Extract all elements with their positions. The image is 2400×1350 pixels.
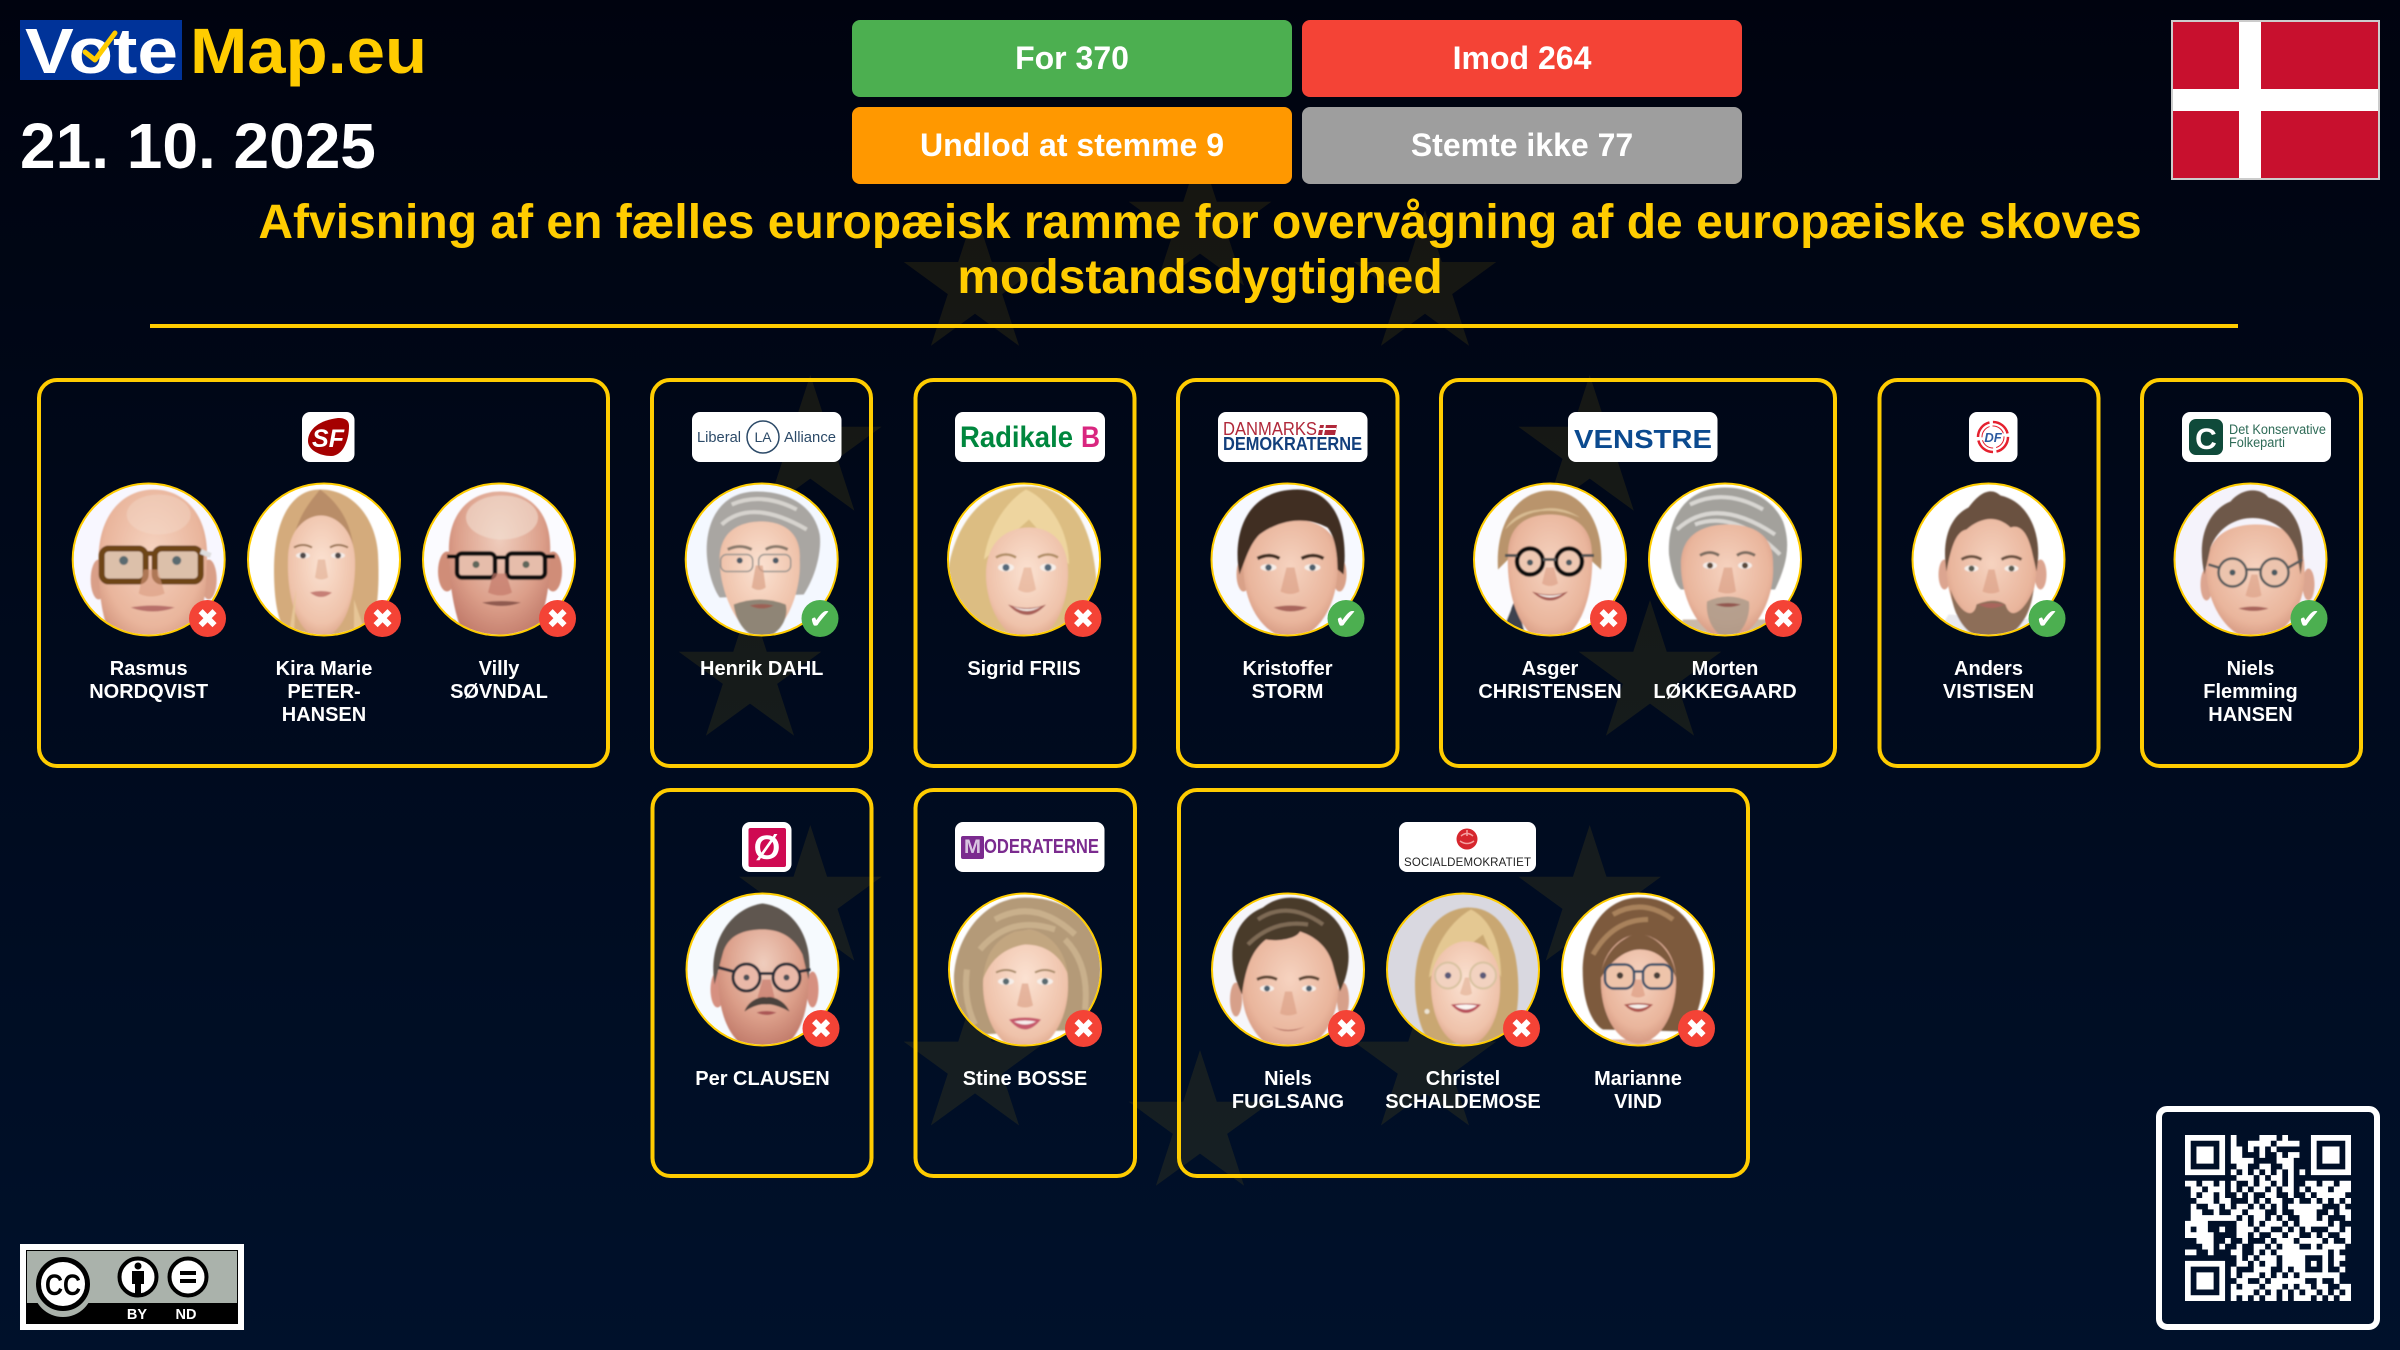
- vote badge: for: ✔: [2036, 604, 2058, 635]
- member: Marianne Vind: [1562, 894, 1715, 1113]
- name: SCHALDEMOSE: [1385, 1091, 1541, 1113]
- party logo: Enhedslisten: [742, 822, 792, 872]
- party logo: Danmarksdemokraterne: DANMARKS: [1223, 419, 1317, 439]
- vote badge: against: ✖: [1772, 604, 1795, 635]
- licence badge: CC BY-ND: [23, 1247, 241, 1327]
- name: Niels: [2227, 658, 2274, 680]
- vote badge: against: [1065, 1010, 1102, 1047]
- total: for: [852, 20, 1292, 97]
- panel: Socialdemokratiet: [1179, 790, 1748, 1176]
- icon: attribution: [120, 1258, 156, 1296]
- licence badge: CC BY-ND: BY: [127, 1307, 147, 1323]
- vote badge: against: ✖: [546, 604, 569, 635]
- party logo: Moderaterne: ODERATERNE: [984, 836, 1099, 858]
- vote badge: for: ✔: [2298, 604, 2320, 635]
- QR code: [2159, 1109, 2377, 1327]
- vote badge: for: [1328, 600, 1364, 637]
- party logo: Liberal Alliance: LA: [754, 429, 772, 445]
- party logo: Det Konservative Folkeparti: [2182, 412, 2331, 462]
- party logo: SF: [302, 412, 354, 462]
- member: Stine Bosse: [949, 894, 1102, 1090]
- panel: Danmarksdemokraterne: [1178, 380, 1398, 766]
- panel: Moderaterne: [916, 790, 1135, 1176]
- party logo: Radikale B: B: [1081, 421, 1100, 454]
- party logo: Moderaterne: [955, 822, 1104, 872]
- vote badge: against: ✖: [371, 604, 394, 635]
- vote badge: for: [2290, 600, 2328, 637]
- panel: Liberal Alliance: [652, 380, 871, 766]
- licence badge: CC BY-ND: CC: [45, 1269, 81, 1302]
- party logo: Dansk Folkeparti: [1969, 412, 2018, 462]
- party logo: Det Konservative Folkeparti: Det Konservative: [2229, 422, 2326, 437]
- total: abstain: Undlod at stemme 9: [920, 127, 1224, 163]
- name: Sigrid FRIIS: [967, 658, 1081, 680]
- logo: VoteMap.eu: [20, 15, 427, 87]
- vote badge: for: [802, 600, 838, 637]
- member: Niels Flemming Hansen: [2174, 484, 2328, 726]
- member: Kira Marie Peter-Hansen: [248, 484, 401, 726]
- party logo: Socialdemokratiet: [1399, 822, 1536, 872]
- vote badge: against: [1328, 1010, 1365, 1047]
- vote badge: against: ✖: [1685, 1014, 1708, 1045]
- party logo: Liberal Alliance: [692, 412, 842, 462]
- member: Henrik Dahl: [686, 484, 838, 680]
- total: did not vote: Stemte ikke 77: [1411, 127, 1633, 163]
- panel: Radikale Venstre: [916, 380, 1134, 766]
- member: Niels Fuglsang: [1212, 894, 1365, 1113]
- name: SØVNDAL: [450, 681, 548, 703]
- member: Kristoffer Storm: [1212, 484, 1364, 703]
- vote badge: against: [1503, 1010, 1540, 1047]
- panel: Venstre: [1441, 380, 1835, 766]
- name: Kira Marie: [276, 658, 372, 680]
- name: STORM: [1252, 681, 1323, 703]
- vote badge: against: [1765, 600, 1802, 637]
- name: Stine BOSSE: [963, 1068, 1087, 1090]
- vote badge: against: ✖: [1335, 1014, 1358, 1045]
- title: modstandsdygtighed: [957, 251, 1443, 304]
- name: Morten: [1692, 658, 1758, 680]
- member: Asger Christensen: [1474, 484, 1627, 703]
- party logo: Radikale B: Radikale: [960, 421, 1073, 454]
- party logo: Moderaterne: M: [964, 837, 981, 858]
- vote badge: against: [802, 1010, 840, 1047]
- vote totals: [852, 20, 1742, 184]
- vote badge: against: [1064, 600, 1102, 637]
- party logo: Venstre: VENSTRE: [1574, 424, 1712, 454]
- name: FUGLSANG: [1232, 1091, 1344, 1113]
- name: Niels: [1264, 1068, 1312, 1090]
- member: Per Clausen: [686, 894, 840, 1090]
- party logo: Det Konservative Folkeparti: C: [2195, 423, 2217, 456]
- name: LØKKEGAARD: [1653, 681, 1797, 703]
- total: abstain: [852, 107, 1292, 184]
- flag: Denmark: [2172, 21, 2379, 179]
- name: Christel: [1426, 1068, 1500, 1090]
- name: Anders: [1954, 658, 2023, 680]
- panel: Det Konservative Folkeparti: [2142, 380, 2361, 766]
- name: HANSEN: [2208, 704, 2293, 726]
- vote badge: against: ✖: [1072, 1014, 1095, 1045]
- vote badge: for: ✔: [1335, 604, 1357, 635]
- party logo: Dansk Folkeparti: DF: [1984, 430, 2003, 445]
- vote badge: against: ✖: [196, 604, 219, 635]
- member: Sigrid Friis: [947, 484, 1102, 680]
- party logo: Venstre: [1568, 412, 1718, 462]
- name: Rasmus: [110, 658, 188, 680]
- vote badge: against: [1590, 600, 1627, 637]
- licence badge: CC BY-ND: ND: [176, 1307, 196, 1323]
- member: Villy Søvndal: [423, 484, 576, 703]
- vote badge: against: ✖: [810, 1014, 832, 1045]
- name: Flemming: [2203, 681, 2298, 703]
- party logo: Danmarksdemokraterne: [1218, 412, 1368, 462]
- vote badge: against: ✖: [1510, 1014, 1533, 1045]
- total: for: For 370: [1015, 40, 1129, 76]
- member: Rasmus Nordqvist: [73, 484, 226, 703]
- icon: no derivatives: [170, 1258, 206, 1296]
- logo: VoteMap.eu: Map.eu: [190, 15, 427, 87]
- vote badge: against: [1678, 1010, 1715, 1047]
- name: Marianne: [1594, 1068, 1682, 1090]
- panel: Enhedslisten: [652, 790, 872, 1176]
- name: NORDQVIST: [89, 681, 208, 703]
- name: VISTISEN: [1943, 681, 2034, 703]
- logo: VoteMap.eu: Vote: [25, 15, 178, 87]
- vote badge: against: ✖: [1597, 604, 1620, 635]
- member: Morten Løkkegaard: [1649, 484, 1802, 703]
- party logo: Liberal Alliance: Liberal: [697, 430, 741, 446]
- name: PETER-: [287, 681, 361, 703]
- total: against: [1302, 20, 1742, 97]
- party logo: Radikale B: [955, 412, 1105, 462]
- name: Per CLAUSEN: [695, 1068, 830, 1090]
- party logo: SF: SF: [312, 425, 345, 453]
- name: HANSEN: [282, 704, 366, 726]
- party logo: Socialdemokratiet: SOCIALDEMOKRATIET: [1404, 857, 1531, 869]
- panel: Dansk Folkeparti: [1880, 380, 2098, 766]
- total: did not vote: [1302, 107, 1742, 184]
- name: VIND: [1614, 1091, 1662, 1113]
- vote badge: for: ✔: [809, 604, 831, 635]
- date: 21. 10. 2025: [20, 110, 376, 182]
- name: CHRISTENSEN: [1478, 681, 1622, 703]
- vote badge: against: ✖: [1072, 604, 1094, 635]
- vote badge: for: [2028, 600, 2066, 637]
- party logo: Liberal Alliance: Alliance: [784, 430, 836, 446]
- name: Kristoffer: [1242, 658, 1333, 680]
- total: against: Imod 264: [1453, 40, 1592, 76]
- title: Afvisning af en fælles europæisk ramme for overvågning af de europæiske skoves: [258, 196, 2142, 249]
- party logo: Danmarksdemokraterne: DEMOKRATERNE: [1223, 434, 1362, 454]
- EU stars circle background: [679, 150, 1721, 1186]
- member: Anders Vistisen: [1912, 484, 2066, 703]
- name: Henrik DAHL: [700, 658, 823, 680]
- vote badge: against: [539, 600, 576, 637]
- name: Asger: [1522, 658, 1579, 680]
- member: Christel Schaldemose: [1385, 894, 1541, 1113]
- vote badge: against: [189, 600, 226, 637]
- party logo: Det Konservative Folkeparti: Folkeparti: [2229, 435, 2285, 450]
- panel: SF: [39, 380, 608, 766]
- party logo: Enhedslisten: Ø: [754, 829, 780, 867]
- vote badge: against: [364, 600, 401, 637]
- name: Villy: [479, 658, 520, 680]
